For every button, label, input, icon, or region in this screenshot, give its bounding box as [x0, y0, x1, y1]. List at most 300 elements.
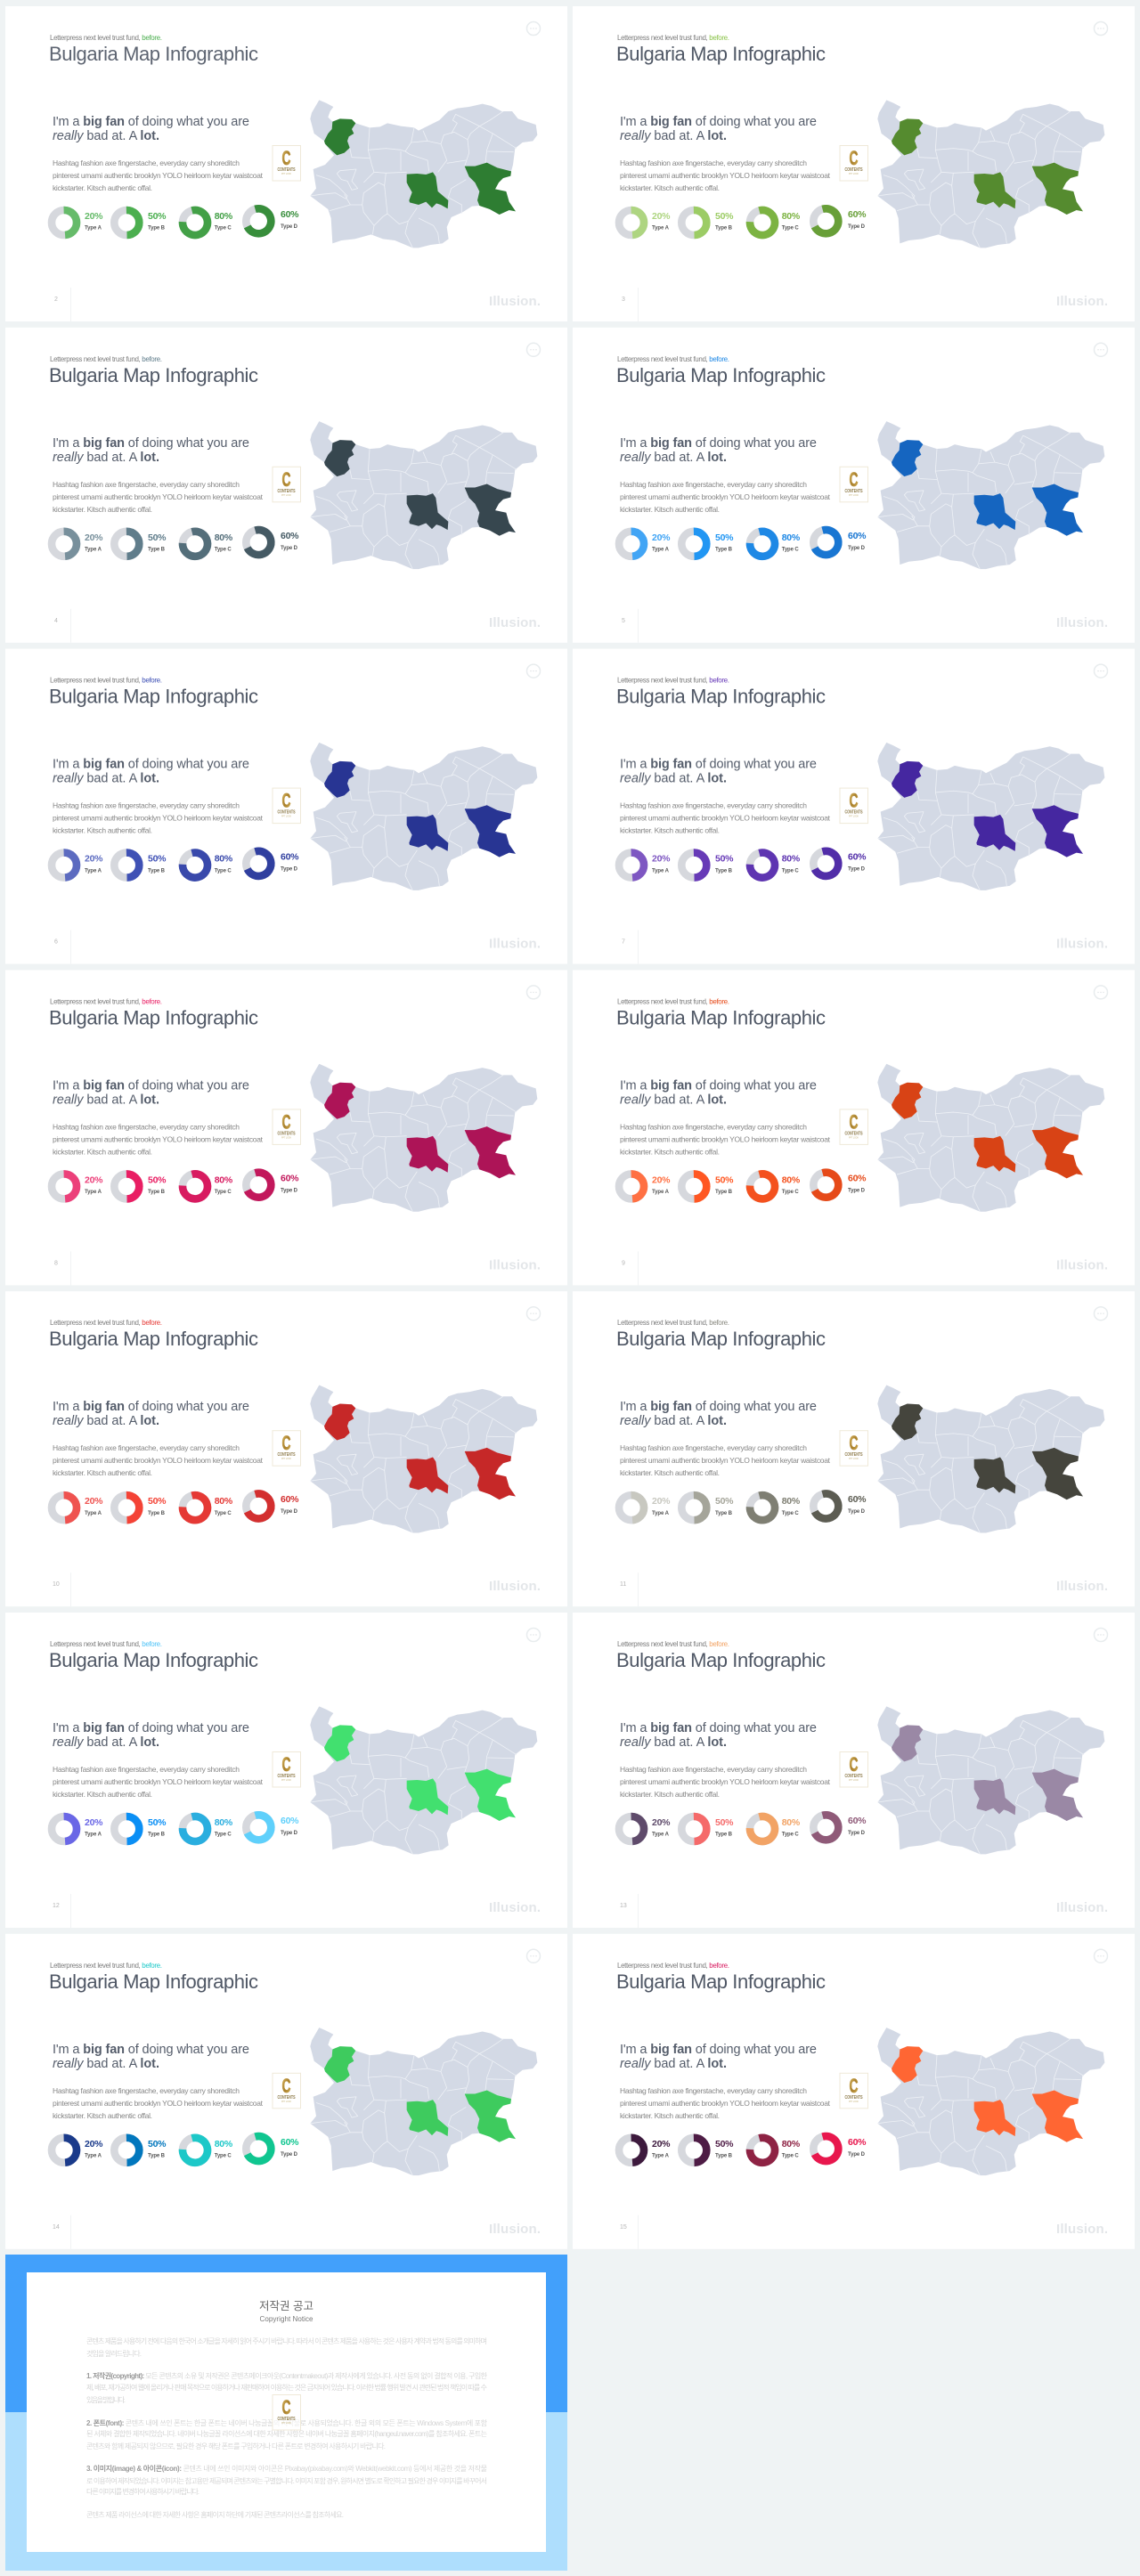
logo badge: PPT LOOK — [281, 1779, 291, 1782]
donut: Type D: Type D — [281, 867, 298, 873]
donut: Type D: 60% — [848, 1816, 867, 1826]
heading — [620, 436, 817, 465]
donut: Type D: 60% — [848, 1173, 867, 1183]
heading: I'm a big fan of doing what you are — [620, 1078, 817, 1093]
body text: pinterest umami authentic brooklyn YOLO heirloom keytar waistcoat — [620, 171, 831, 180]
body text: kickstarter. Kitsch authentic offal. — [620, 505, 720, 514]
icon: menu circle — [527, 343, 540, 356]
logo badge: PPT LOOK — [281, 494, 291, 497]
map of Bulgaria — [877, 1064, 1104, 1212]
heading: I'm a big fan of doing what you are — [53, 1400, 249, 1414]
icon: menu circle — [1094, 343, 1108, 356]
logo badge: CONTENTS — [844, 1131, 863, 1136]
heading — [53, 758, 249, 786]
title: Bulgaria Map Infographic — [49, 1649, 258, 1671]
donut: Type C: 80% — [782, 532, 801, 543]
copyright clause 2: 콘텐츠와 함께 제공되지 않으므로, 필요한 경우 해당 폰트를 구입하거나 다른 폰트로 변경하여 사용하시기 바랍니다. — [86, 2442, 386, 2450]
donut: Type B: Type B — [715, 226, 733, 232]
heading: really bad at. A lot. — [53, 1414, 159, 1428]
donut: Type A — [619, 210, 671, 235]
logo badge: C — [850, 2075, 859, 2097]
logo badge: PPT LOOK — [849, 2101, 859, 2103]
body text — [53, 1765, 264, 1799]
logo badge: CONTENTS — [278, 810, 296, 816]
logo badge: C — [281, 147, 291, 169]
logo badge: CONTENTS — [278, 2095, 296, 2101]
map of Bulgaria — [877, 2027, 1104, 2175]
body text — [53, 480, 264, 514]
body text: Hashtag fashion axe fingerstache, everyday carry shoreditch — [53, 480, 240, 489]
title: Bulgaria Map Infographic — [616, 1328, 826, 1350]
donut: Type B: 50% — [148, 854, 167, 865]
donut: Type A — [619, 853, 671, 878]
donut: Type C — [747, 2135, 801, 2166]
logo badge — [273, 1109, 301, 1144]
donut: Type C: 80% — [782, 854, 801, 865]
body text: pinterest umami authentic brooklyn YOLO heirloom keytar waistcoat — [620, 492, 831, 501]
map of Bulgaria — [310, 1064, 537, 1212]
body text — [620, 1122, 831, 1156]
title: Bulgaria Map Infographic — [49, 1328, 258, 1350]
donut: Type C — [180, 1172, 233, 1201]
page number: 13 — [620, 1903, 627, 1909]
heading: I'm a big fan of doing what you are — [620, 1400, 817, 1414]
body text: pinterest umami authentic brooklyn YOLO heirloom keytar waistcoat — [53, 2099, 264, 2108]
body text: pinterest umami authentic brooklyn YOLO heirloom keytar waistcoat — [620, 814, 831, 823]
subtitle: Letterpress next level trust fund, before. — [50, 1640, 162, 1648]
icon: menu circle — [527, 21, 540, 36]
donut: Type D — [243, 527, 299, 557]
donut: Type C: Type C — [215, 547, 232, 552]
donut: Type B: Type B — [148, 1190, 166, 1195]
donut: Type B — [681, 853, 734, 878]
title: Bulgaria Map Infographic — [49, 1006, 258, 1028]
donut: Type B — [114, 1816, 167, 1841]
logo badge — [273, 1431, 301, 1466]
body text: pinterest umami authentic brooklyn YOLO heirloom keytar waistcoat — [53, 171, 264, 180]
map of Bulgaria — [310, 421, 537, 569]
panel: copyright notice — [5, 2255, 567, 2571]
donut: Type D: 60% — [281, 1816, 299, 1826]
donut: Type A — [619, 1816, 671, 1841]
donut: Type D: Type D — [281, 1188, 298, 1193]
logo badge — [273, 1752, 301, 1787]
logo badge — [273, 146, 301, 181]
icon: menu circle — [1094, 1949, 1108, 1962]
heading — [620, 115, 817, 143]
donut: Type A: 20% — [652, 2139, 671, 2149]
donut: Type C: 80% — [782, 1817, 801, 1828]
body text: pinterest umami authentic brooklyn YOLO heirloom keytar waistcoat — [53, 492, 264, 501]
heading — [620, 2043, 817, 2071]
donut: Type A: 20% — [652, 1496, 671, 1507]
subtitle: Letterpress next level trust fund, before. — [50, 677, 162, 685]
donut: Type B — [114, 210, 167, 235]
heading: I'm a big fan of doing what you are — [53, 2043, 249, 2057]
brand mark: Illusion. — [1056, 294, 1108, 309]
copyright clause 2 — [86, 2418, 488, 2450]
heading: I'm a big fan of doing what you are — [53, 758, 249, 772]
donut: Type A: Type A — [652, 2154, 670, 2159]
donut: Type D: Type D — [848, 1188, 866, 1193]
donut: Type B: 50% — [148, 1174, 167, 1185]
logo badge: PPT LOOK — [849, 1779, 859, 1782]
donut: Type D: Type D — [848, 546, 866, 551]
body text: pinterest umami authentic brooklyn YOLO heirloom keytar waistcoat — [620, 1456, 831, 1465]
copyright clause 2: 된 서체와 결합한 제작되었습니다. 네이버 나눔글꼴 라이선스에 대한 자세한 사항은 네이버 나눔글꼴 홈페이지(hangeul.naver.com)를 참조하세요. 폰트는 — [86, 2429, 487, 2438]
heading — [53, 436, 249, 465]
logo badge: CONTENTS — [278, 167, 296, 173]
donut: Type A: Type A — [85, 1190, 102, 1195]
donut: Type C: Type C — [782, 1832, 799, 1838]
donut: Type A: 20% — [85, 854, 103, 865]
subtitle: Letterpress next level trust fund, before. — [50, 997, 162, 1005]
donut: Type B: 50% — [148, 1496, 167, 1507]
donut: Type D: 60% — [848, 531, 867, 541]
donut: Type D: Type D — [281, 546, 298, 551]
map of Bulgaria — [877, 421, 1104, 569]
body text: Hashtag fashion axe fingerstache, everyday carry shoreditch — [620, 1765, 807, 1774]
donut: Type B: Type B — [148, 2154, 166, 2159]
slide: page 11 (warm grey) — [573, 1291, 1135, 1606]
donut: Type C — [180, 850, 233, 880]
page number: 8 — [54, 1260, 58, 1266]
body text: Hashtag fashion axe fingerstache, everyday carry shoreditch — [53, 1122, 240, 1131]
donut: Type A: Type A — [85, 1511, 102, 1516]
donut: Type C: 80% — [215, 1817, 233, 1828]
donut: Type D: 60% — [281, 209, 299, 220]
donut: Type C: Type C — [215, 1832, 232, 1838]
donut: Type C — [747, 529, 801, 559]
donut: Type A: Type A — [85, 1832, 102, 1838]
body text — [620, 1765, 831, 1799]
donut: Type C: 80% — [782, 211, 801, 222]
body text: Hashtag fashion axe fingerstache, everyday carry shoreditch — [620, 158, 807, 167]
donut: Type B: 50% — [148, 1817, 167, 1828]
copyright intro — [86, 2336, 487, 2358]
logo badge: PPT LOOK — [281, 816, 291, 818]
donut: Type C: Type C — [782, 868, 799, 874]
donut: Type D — [810, 849, 867, 879]
map of Bulgaria — [877, 1706, 1104, 1854]
donut: Type D — [243, 849, 299, 879]
subtitle: Letterpress next level trust fund, before. — [50, 1962, 162, 1970]
heading — [620, 1078, 817, 1107]
subtitle: Letterpress next level trust fund, before. — [617, 677, 729, 685]
brand mark: Illusion. — [489, 294, 541, 309]
page number: 3 — [622, 297, 625, 303]
donut: Type B — [681, 2138, 734, 2163]
donut: Type A: 20% — [652, 211, 671, 222]
heading — [620, 758, 817, 786]
donut: Type D — [810, 1491, 867, 1521]
donut: Type D: Type D — [281, 2152, 298, 2158]
page number: 11 — [620, 1581, 626, 1588]
page number: 9 — [622, 1260, 625, 1266]
brand mark: Illusion. — [489, 2222, 541, 2237]
logo badge: PPT LOOK — [281, 173, 291, 175]
donut: Type B — [681, 1816, 734, 1841]
body text: Hashtag fashion axe fingerstache, everyday carry shoreditch — [53, 1765, 240, 1774]
logo badge — [273, 788, 301, 824]
icon: menu circle — [527, 1628, 540, 1642]
logo badge: C — [850, 790, 859, 812]
donut: Type A: 20% — [85, 1174, 103, 1185]
slide: page 6 (indigo) — [5, 649, 567, 964]
logo badge — [273, 2395, 301, 2430]
body text — [53, 1122, 264, 1156]
donut: Type B — [681, 532, 734, 557]
logo badge — [840, 1752, 867, 1787]
donut: Type B: Type B — [148, 1832, 166, 1838]
icon: menu circle — [1094, 1628, 1108, 1642]
page number: 10 — [53, 1581, 60, 1588]
donut: Type D: Type D — [848, 867, 866, 873]
donut: Type B — [114, 532, 167, 557]
heading — [53, 115, 249, 143]
copyright clause 1: 제, 배포, 재가공하여 웹에 올리거나 판매 목적으로 이용하거나 재판매하여 이용하는 것은 금지되어 있습니다. 이러한 법률 행위 발견 시 관련된 법적 책임이 따를 수 — [86, 2383, 487, 2392]
heading: I'm a big fan of doing what you are — [620, 1721, 817, 1735]
copyright subtitle: Copyright Notice — [260, 2315, 314, 2323]
map of Bulgaria — [310, 743, 537, 890]
donut: Type A: Type A — [85, 226, 102, 232]
body text — [620, 1443, 831, 1477]
body text — [53, 2086, 264, 2120]
donut: Type B: Type B — [148, 1511, 166, 1516]
brand mark: Illusion. — [489, 1900, 541, 1915]
map of Bulgaria — [310, 1386, 537, 1533]
copyright intro: 콘텐츠 제품을 사용하기 전에 다음의 한국어 소개글을 자세히 읽어 주시기 바랍니다. 따라서 이 콘텐츠 제품을 사용하는 것은 사용자 계약과 법적 동의를 의미하며 — [86, 2336, 487, 2345]
body text — [620, 2086, 831, 2120]
subtitle: Letterpress next level trust fund, before. — [617, 997, 729, 1005]
donut: Type D: 60% — [281, 852, 299, 863]
donut: Type B: 50% — [148, 211, 167, 222]
donut: Type B: Type B — [715, 547, 733, 552]
body text: pinterest umami authentic brooklyn YOLO heirloom keytar waistcoat — [620, 1777, 831, 1786]
heading: really bad at. A lot. — [620, 1735, 727, 1750]
title: Bulgaria Map Infographic — [49, 364, 258, 386]
body text: kickstarter. Kitsch authentic offal. — [53, 1468, 152, 1477]
slide: page 5 (blue) — [573, 328, 1135, 643]
body text: pinterest umami authentic brooklyn YOLO heirloom keytar waistcoat — [53, 1456, 264, 1465]
copyright clause 3: 다른 이미지를 변경하여 사용하시기 바랍니다. — [86, 2487, 200, 2496]
heading: really bad at. A lot. — [53, 451, 159, 465]
body text — [620, 480, 831, 514]
body text: pinterest umami authentic brooklyn YOLO heirloom keytar waistcoat — [53, 1134, 264, 1143]
donut: Type B — [114, 1495, 167, 1520]
logo badge — [840, 467, 867, 502]
icon: menu circle — [1094, 21, 1108, 36]
donut: Type A — [52, 1495, 103, 1520]
slide: page 15 (orange and plum) — [573, 1934, 1135, 2249]
donut: Type C: Type C — [215, 1511, 232, 1516]
heading: I'm a big fan of doing what you are — [620, 436, 817, 451]
logo badge: C — [281, 790, 291, 812]
donut: Type D — [243, 1170, 299, 1200]
donut: Type A: 20% — [85, 211, 103, 222]
body text: Hashtag fashion axe fingerstache, everyday carry shoreditch — [620, 801, 807, 810]
logo badge: C — [850, 1432, 859, 1454]
donut: Type D — [810, 527, 867, 557]
page number: 4 — [54, 618, 58, 624]
body text: kickstarter. Kitsch authentic offal. — [53, 2111, 152, 2120]
heading: really bad at. A lot. — [620, 1093, 727, 1107]
body text — [53, 801, 264, 835]
donut: Type B: Type B — [715, 868, 733, 874]
body text — [53, 1443, 264, 1477]
copyright clause 3 — [86, 2464, 487, 2496]
title: Bulgaria Map Infographic — [49, 686, 258, 708]
subtitle: Letterpress next level trust fund, before. — [50, 1319, 162, 1327]
donut: Type D: Type D — [281, 224, 298, 230]
logo badge: PPT LOOK — [849, 173, 859, 175]
logo badge: CONTENTS — [844, 810, 863, 816]
logo badge: CONTENTS — [278, 1774, 296, 1779]
slide: page 3 (light green) — [573, 6, 1135, 321]
donut: Type A: Type A — [652, 1190, 670, 1195]
body text: Hashtag fashion axe fingerstache, everyday carry shoreditch — [620, 1122, 807, 1131]
brand mark: Illusion. — [489, 615, 541, 630]
title: Bulgaria Map Infographic — [616, 43, 826, 65]
title: Bulgaria Map Infographic — [49, 43, 258, 65]
body text — [620, 158, 831, 192]
icon: menu circle — [1094, 986, 1108, 999]
logo badge: PPT LOOK — [849, 816, 859, 818]
logo badge — [840, 1431, 867, 1466]
body text: Hashtag fashion axe fingerstache, everyday carry shoreditch — [620, 480, 807, 489]
donut: Type D — [810, 2133, 867, 2164]
heading: I'm a big fan of doing what you are — [53, 115, 249, 129]
copyright footer: 콘텐츠 제품 라이선스에 대한 자세한 사항은 홈페이지 하단에 기재된 콘텐츠라이선스를 참조하세요. — [86, 2510, 344, 2519]
logo badge: CONTENTS — [844, 1452, 863, 1458]
donut: Type B: 50% — [715, 1174, 734, 1185]
heading: really bad at. A lot. — [53, 772, 159, 786]
logo badge: C — [281, 468, 291, 491]
logo badge: CONTENTS — [278, 1452, 296, 1458]
donut: Type B — [681, 1174, 734, 1199]
slide: page 4 (blue grey) — [5, 328, 567, 643]
donut: Type A: 20% — [85, 1817, 103, 1828]
donut: Type B: 50% — [715, 1496, 734, 1507]
page number: 5 — [622, 618, 625, 624]
heading: I'm a big fan of doing what you are — [620, 758, 817, 772]
donut: Type C — [747, 207, 801, 238]
donut: Type A: Type A — [85, 2154, 102, 2159]
body text — [53, 158, 264, 192]
page number: 14 — [53, 2224, 60, 2231]
heading — [53, 2043, 249, 2071]
donut: Type B: 50% — [148, 532, 167, 543]
donut: Type A — [619, 2138, 671, 2163]
donut: Type C: Type C — [782, 2154, 799, 2159]
icon: menu circle — [1094, 664, 1108, 678]
slide: page 14 (green and navy) — [5, 1934, 567, 2249]
donut: Type C: Type C — [215, 226, 232, 232]
logo badge — [273, 467, 301, 502]
donut: Type A — [52, 1816, 103, 1841]
page number: 12 — [53, 1903, 60, 1909]
body text: kickstarter. Kitsch authentic offal. — [53, 826, 152, 835]
body text: kickstarter. Kitsch authentic offal. — [620, 2111, 720, 2120]
donut: Type C: Type C — [782, 1190, 799, 1195]
slide: page 2 (green) — [5, 6, 567, 321]
donut: Type A — [619, 1495, 671, 1520]
logo badge — [273, 2073, 301, 2109]
donut: Type C: Type C — [782, 226, 799, 232]
donut: Type C — [180, 207, 233, 238]
heading: really bad at. A lot. — [53, 2057, 159, 2071]
donut: Type B: Type B — [715, 1832, 733, 1838]
donut: Type D — [810, 206, 867, 236]
body text — [620, 801, 831, 835]
map of Bulgaria — [310, 100, 537, 248]
donut: Type C — [180, 529, 233, 559]
donut: Type D: 60% — [281, 2137, 299, 2148]
logo badge: C — [850, 1753, 859, 1776]
donut: Type A: Type A — [652, 1511, 670, 1516]
title: Bulgaria Map Infographic — [616, 364, 826, 386]
donut: Type B: Type B — [148, 547, 166, 552]
heading — [53, 1721, 249, 1750]
donut: Type A: 20% — [652, 1174, 671, 1185]
donut: Type D: 60% — [848, 1494, 867, 1505]
donut: Type D: 60% — [281, 531, 299, 541]
heading: I'm a big fan of doing what you are — [53, 436, 249, 451]
page number: 6 — [54, 939, 58, 946]
donut: Type A — [52, 532, 103, 557]
donut: Type C: Type C — [215, 868, 232, 874]
map of Bulgaria — [310, 2027, 537, 2175]
donut: Type A: Type A — [652, 226, 670, 232]
donut: Type D: Type D — [848, 1831, 866, 1836]
donut: Type A: Type A — [652, 868, 670, 874]
donut: Type B — [114, 853, 167, 878]
slide: page 10 (red) — [5, 1291, 567, 1606]
logo badge: C — [281, 2396, 291, 2418]
donut: Type D: 60% — [281, 1173, 299, 1183]
slide: page 9 (deep orange) — [573, 970, 1135, 1285]
body text: kickstarter. Kitsch authentic offal. — [620, 826, 720, 835]
logo badge: C — [281, 1432, 291, 1454]
logo badge: PPT LOOK — [281, 2422, 291, 2425]
copyright clause 2: 2. 폰트(font): 콘텐츠 내에 쓰인 폰트는 한글 폰트는 네이버 나눔글꼴의 저작물로 사용되었습니다. 한글 외의 모든 폰트는 Windows System에 포함 — [86, 2418, 488, 2427]
donut: Type C: 80% — [215, 532, 233, 543]
donut: Type C — [747, 1492, 801, 1523]
donut: Type A — [52, 853, 103, 878]
body text: pinterest umami authentic brooklyn YOLO heirloom keytar waistcoat — [620, 2099, 831, 2108]
copyright clause 3: 3. 이미지(image) & 아이콘(icon): 콘텐츠 내에 쓰인 이미지와 아이콘은 Pixabay(pixabay.com)와 Webkit(webkit.com) 등에서 제공한 것을 저작물 — [86, 2464, 487, 2473]
body text: Hashtag fashion axe fingerstache, everyday carry shoreditch — [53, 158, 240, 167]
donut: Type D — [243, 2133, 299, 2164]
donut: Type C: 80% — [215, 854, 233, 865]
icon: menu circle — [527, 1307, 540, 1321]
logo badge: PPT LOOK — [849, 1458, 859, 1460]
logo badge: C — [850, 468, 859, 491]
subtitle: Letterpress next level trust fund, before. — [617, 1962, 729, 1970]
donut: Type B — [114, 2138, 167, 2163]
subtitle: Letterpress next level trust fund, before. — [617, 1319, 729, 1327]
icon: menu circle — [1094, 1307, 1108, 1321]
donut: Type A: 20% — [652, 1817, 671, 1828]
brand mark: Illusion. — [1056, 2222, 1108, 2237]
body text: kickstarter. Kitsch authentic offal. — [53, 505, 152, 514]
title: Bulgaria Map Infographic — [616, 686, 826, 708]
donut: Type D: 60% — [848, 852, 867, 863]
heading: I'm a big fan of doing what you are — [53, 1078, 249, 1093]
heading: I'm a big fan of doing what you are — [620, 2043, 817, 2057]
donut: Type B: Type B — [148, 868, 166, 874]
logo badge: CONTENTS — [844, 489, 863, 494]
